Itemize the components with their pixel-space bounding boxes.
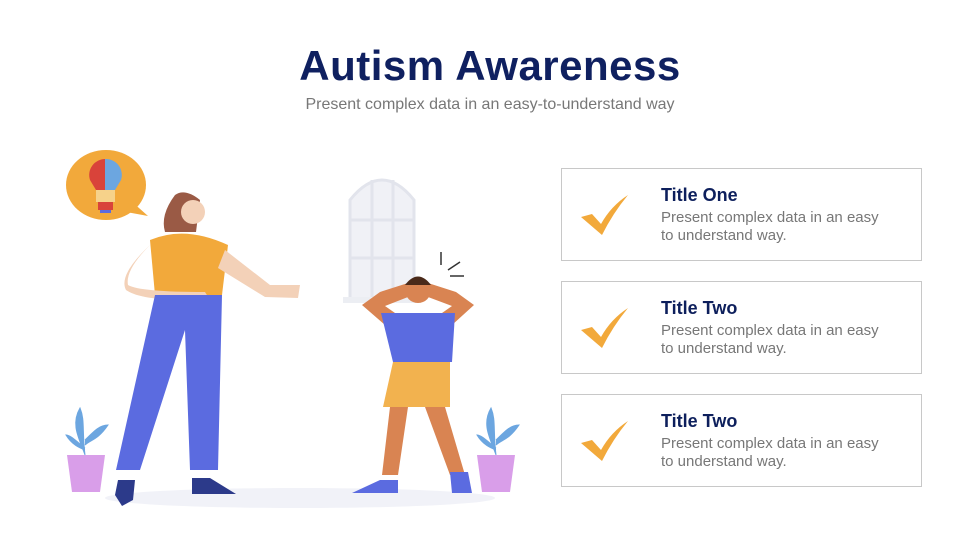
card 3: Present complex data in an easy	[661, 435, 879, 452]
card 1: Present complex data in an easy	[661, 209, 879, 226]
card 2: to understand way.	[661, 340, 787, 357]
card 1: to understand way.	[661, 227, 787, 244]
check icon	[581, 421, 628, 461]
floor shadow	[105, 488, 495, 508]
window	[343, 180, 421, 303]
speech bubble with bulb	[66, 150, 148, 220]
card 3: Title Two	[661, 411, 737, 431]
card 2: Present complex data in an easy	[661, 322, 879, 339]
check icon	[581, 308, 628, 348]
card 1	[561, 168, 922, 261]
card 3	[561, 394, 922, 487]
card 2: Title Two	[661, 298, 737, 318]
woman	[115, 192, 300, 506]
plant right	[477, 408, 519, 492]
plant left	[66, 408, 108, 492]
check icon	[581, 195, 628, 235]
title: Autism Awareness	[299, 42, 681, 89]
illustration	[65, 150, 520, 508]
subtitle: Present complex data in an easy-to-understand way	[305, 96, 675, 113]
boy	[352, 252, 474, 493]
card 2	[561, 281, 922, 374]
card 3: to understand way.	[661, 453, 787, 470]
card 1: Title One	[661, 185, 738, 205]
